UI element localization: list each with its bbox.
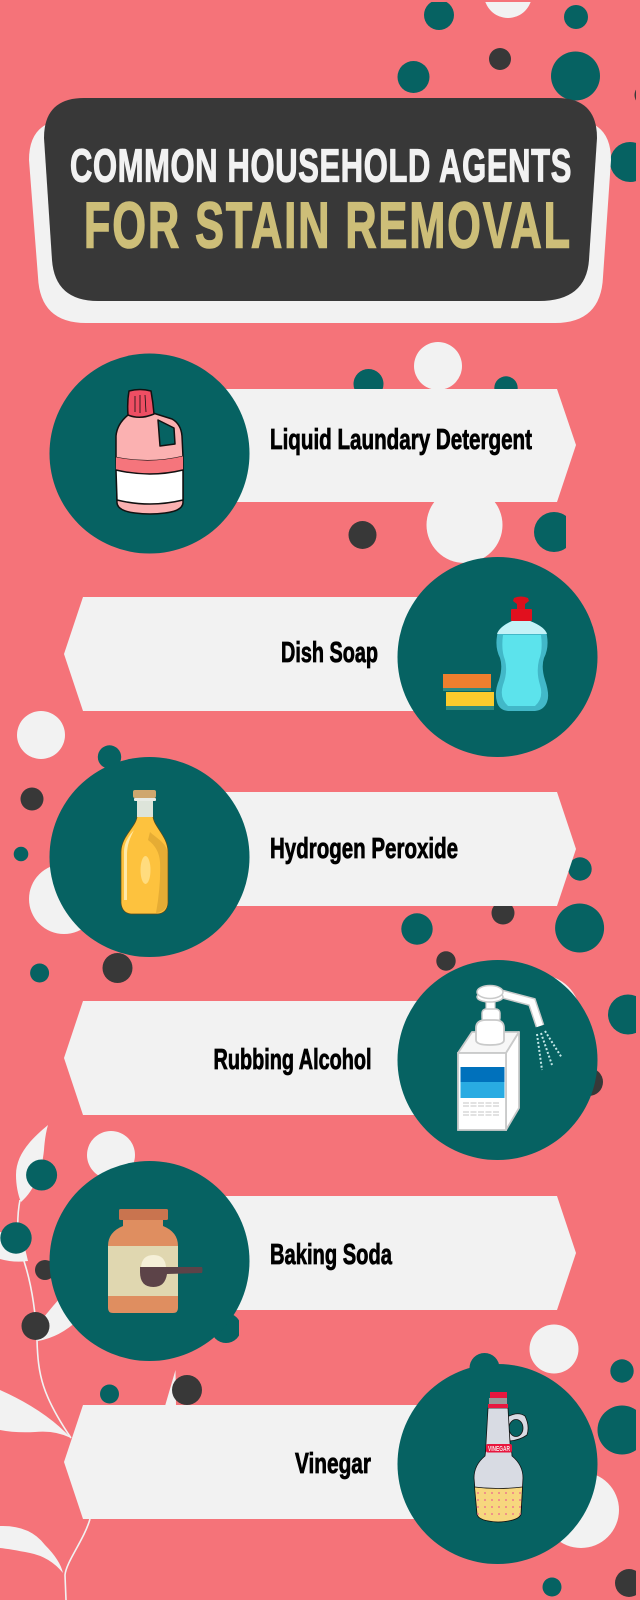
icon: baking soda jar and scoop [108, 1209, 202, 1313]
icon: amber bottle [121, 790, 168, 914]
row 6: vinegar [64, 1364, 598, 1564]
decorative plant [0, 1125, 176, 1600]
title panel offset backing [29, 120, 611, 323]
label 6: Vinegar [295, 1448, 371, 1480]
title panel [29, 98, 611, 323]
label 2: Dish Soap [281, 637, 378, 669]
row 1: liquid laundry detergent [50, 354, 576, 554]
circle 4 [398, 960, 598, 1160]
circle 3 [50, 757, 250, 957]
circle 6 [398, 1364, 598, 1564]
banner 2 [64, 597, 497, 711]
banner 4 [64, 1001, 497, 1115]
banner 5 [150, 1196, 576, 1310]
circle 1 [50, 354, 250, 554]
row 4: rubbing alcohol [64, 960, 598, 1160]
banner 1 [150, 389, 576, 502]
row 2: dish soap [64, 557, 598, 757]
row 5: baking soda [50, 1161, 576, 1361]
banner 3 [150, 792, 576, 906]
label 1: Liquid Laundary Detergent [270, 424, 532, 456]
icon: vinegar bottle [474, 1392, 528, 1522]
circle 2 [398, 557, 598, 757]
label 5: Baking Soda [270, 1239, 393, 1271]
label 4: Rubbing Alcohol [214, 1044, 372, 1076]
label 3: Hydrogen Peroxide [270, 833, 458, 865]
icon: dish soap and sponges [443, 596, 548, 711]
banner 6 [64, 1405, 497, 1519]
row 3: hydrogen peroxide [50, 757, 576, 957]
icon: alcohol pump bottle [458, 986, 562, 1130]
circle 5 [50, 1161, 250, 1361]
icon: vinegar bottle: VINEGAR [488, 1446, 510, 1453]
icon: detergent bottle [116, 390, 183, 514]
title panel dark plate [44, 98, 597, 301]
